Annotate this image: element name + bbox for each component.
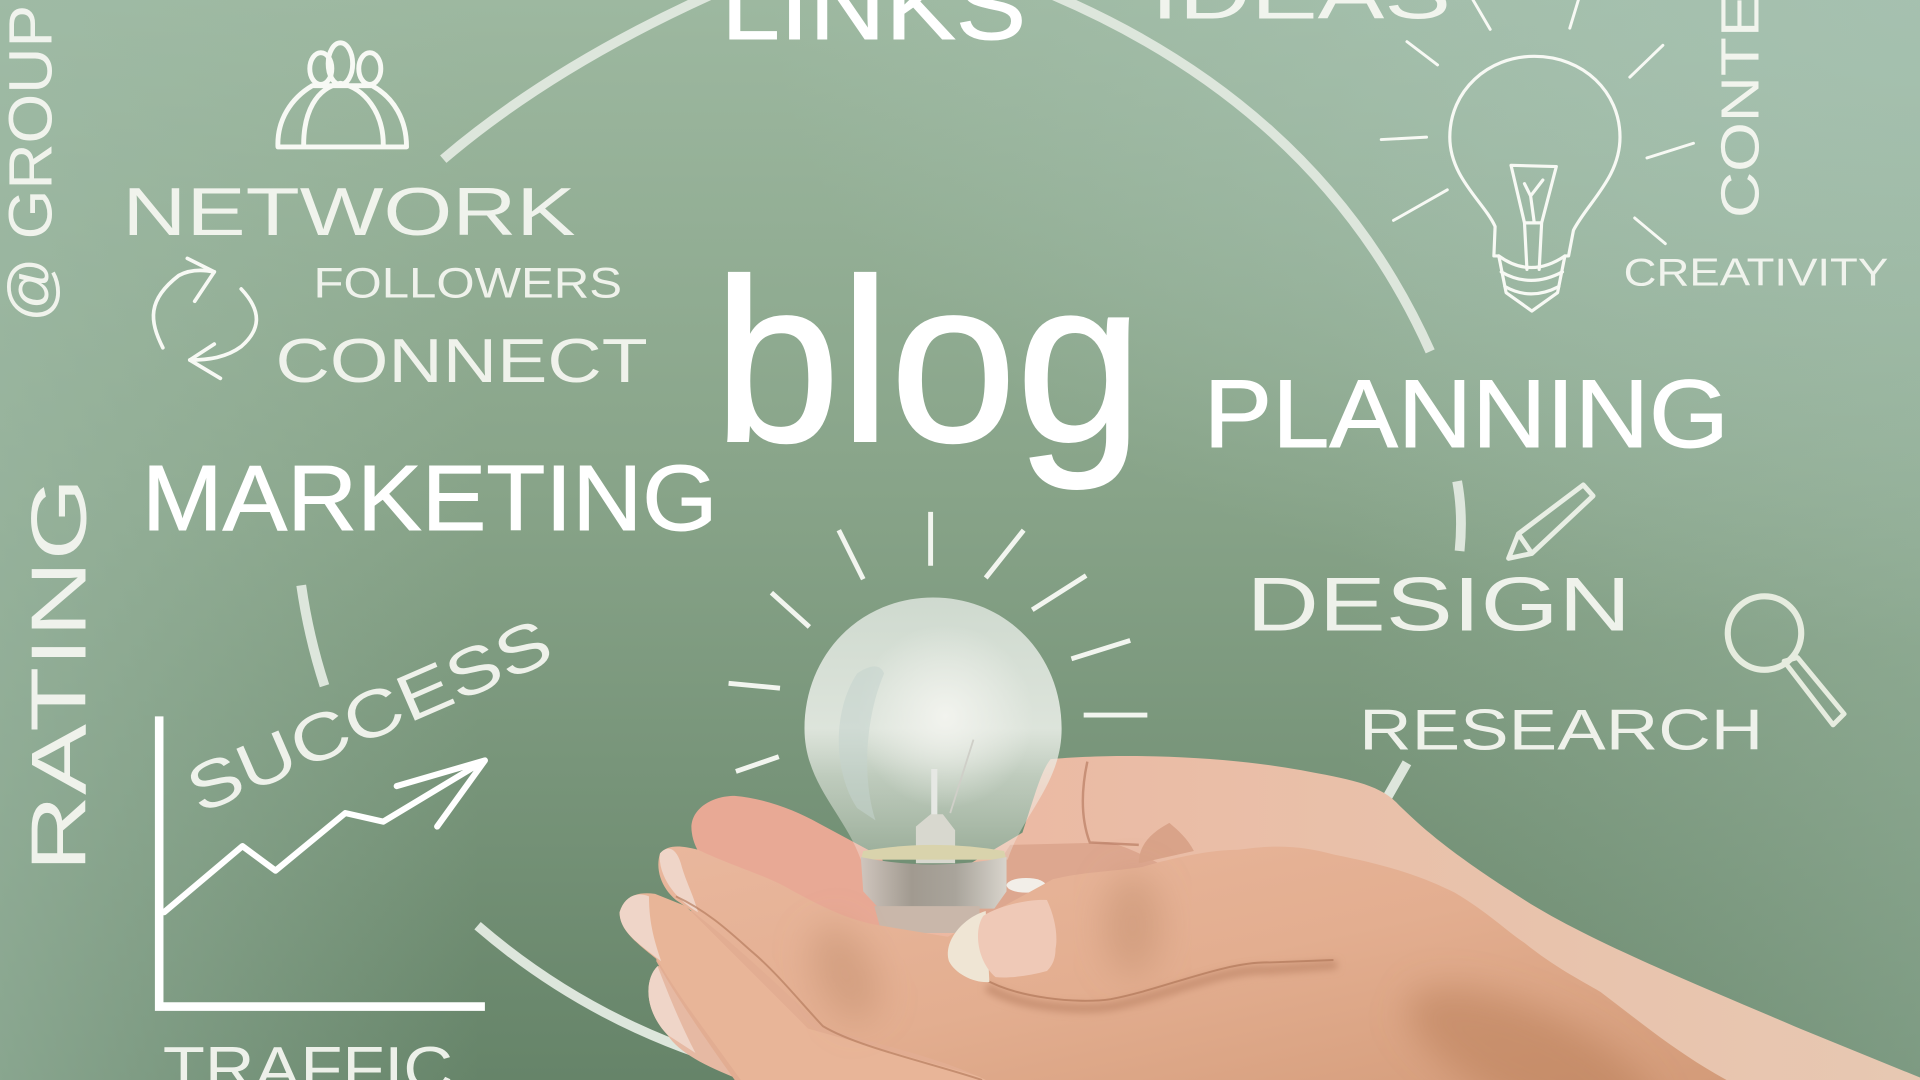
bulb: filament mount (916, 814, 955, 863)
heading: planning: PLANNING (1204, 360, 1729, 468)
hand: rear finger (691, 796, 906, 943)
label: design: DESIGN (1247, 563, 1631, 648)
hand: finger crease (676, 896, 982, 1080)
icon: idea bulb sketch (1450, 56, 1620, 311)
bulb: wire (950, 740, 973, 813)
bulb rays (729, 512, 1147, 771)
title: blog: blog (714, 233, 1142, 491)
chart axes (159, 716, 485, 1007)
label: network: NETWORK (122, 175, 576, 250)
label: rating: RATING (15, 478, 103, 872)
bulb: left highlight (839, 666, 884, 820)
hand: lower thumb fold shadow (987, 965, 1337, 1008)
hand: index nail (660, 849, 698, 912)
hand: thumb nail (978, 900, 1056, 977)
label: followers: FOLLOWERS (313, 260, 622, 308)
hand: third finger (648, 966, 857, 1080)
bulb: glow (857, 624, 1033, 808)
hand: middle nail (620, 895, 661, 961)
bulb: filament stem (932, 769, 937, 818)
hand: third nail (648, 966, 696, 1053)
chart: rising line (159, 716, 485, 1007)
hand: middle finger (620, 893, 992, 1080)
icon: idea bulb rays (1381, 0, 1693, 244)
hand: palm (955, 842, 1176, 931)
lightbulb (804, 598, 1062, 933)
hand: finger knuckle shadow (797, 914, 893, 1032)
bulb: lower glass (874, 906, 980, 933)
icon: cycle arrows (153, 258, 256, 378)
label: research: RESEARCH (1359, 698, 1763, 762)
hand: thumb free edge (948, 911, 989, 982)
bulb: metal base (861, 857, 1007, 909)
icon: pencil (1509, 485, 1593, 558)
icon: magnifier (1728, 596, 1844, 725)
hand: wrist shadow (1388, 958, 1673, 1080)
bulb: glass (804, 598, 1062, 860)
circular connector arcs (301, 0, 1461, 1053)
bulb: collar (861, 845, 1007, 860)
hand: back hand (857, 756, 1920, 1080)
label: success: SUCCESS (176, 605, 563, 828)
hand: thumb crease (983, 960, 1333, 1001)
hand: palm notch (1139, 823, 1194, 863)
label: creativity: CREATIVITY (1624, 251, 1888, 294)
icon: people group (278, 43, 407, 147)
chart trend arrow (164, 760, 485, 912)
hand: front hand (658, 846, 1727, 1080)
heading: marketing: MARKETING (142, 446, 718, 550)
hand: finger crease (1083, 762, 1139, 845)
hand: knuckle shadow (1103, 873, 1162, 976)
label: connect: CONNECT (276, 326, 648, 396)
hand: finger backing (656, 906, 1016, 1080)
bulb: reflection (1007, 878, 1046, 893)
